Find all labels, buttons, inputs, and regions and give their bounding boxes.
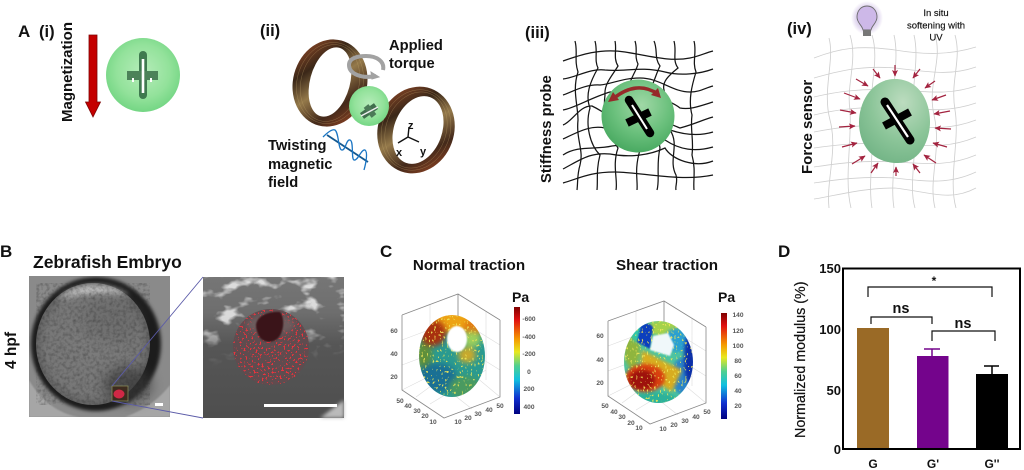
colorbar: -200 [522,351,536,358]
micrograph: whole embryo [29,276,170,417]
chart: normal traction [390,257,536,426]
icon: xyz axes: x [396,147,403,159]
colorbar: 120 [732,328,744,335]
arrows: compressive forces [839,65,951,176]
panel label B: B [0,242,12,261]
axis tick labels: 40 [404,403,412,410]
significance bracket star [868,274,992,297]
axis tick labels: 60 [390,328,398,335]
zoom connector lines [112,277,203,418]
colorbar: 140 [732,312,744,319]
colorbar: Pa [512,289,529,305]
bar G' with error bar [917,349,948,449]
significance bracket ns right [932,316,995,341]
icon: right coil [365,76,467,184]
y-axis tick labels: 0 [834,442,841,457]
label (i): (i) [39,23,55,41]
panel: B zebrafish embryo [0,242,344,418]
axis tick labels: 50 [496,403,504,410]
axis tick labels: 10 [659,426,667,433]
3D axes box [608,301,706,424]
colorbar: 200 [523,386,535,393]
icon: xyz axes: z [408,120,414,132]
label Applied torque: Applied [389,38,443,54]
arrow: bidirectional rotation [608,88,661,102]
label Twisting magnetic field: field [268,175,298,191]
axis tick labels: 60 [596,333,604,340]
panel label A: A [18,22,30,41]
bar G [857,328,889,449]
label Force sensor: Force sensor [799,80,816,174]
icon: xyz axes [396,120,427,159]
title Normal traction: Normal traction [413,257,525,274]
title Shear traction: Shear traction [616,257,718,274]
axis tick labels [596,333,711,433]
text: in situ softening: softening with [907,20,965,32]
significance bracket star: * [932,274,937,288]
panel: C traction maps [380,242,744,433]
axis tick labels [390,328,504,426]
axis tick labels: 20 [670,422,678,429]
y-axis tick labels [819,261,841,457]
title Zebrafish Embryo: Zebrafish Embryo [33,252,182,272]
axis tick labels: 20 [464,415,472,422]
3D surface [419,315,485,397]
axis tick labels: 30 [474,411,482,418]
colorbar [718,289,744,419]
colorbar: -400 [522,334,536,341]
colorbar: Pa [718,289,735,305]
colorbar: 60 [734,373,742,380]
text: in situ softening: UV [929,32,943,44]
axis tick labels: 20 [390,374,398,381]
icon: green droplet with rod [106,38,180,112]
icon: small droplet [349,86,389,126]
significance bracket ns left: ns [893,301,909,317]
axis tick labels: 10 [429,419,437,426]
panel label C: C [380,242,392,261]
colorbar: 0 [527,369,531,376]
panel: D bar chart [778,242,1020,470]
chart frame [843,268,1020,449]
axis tick labels: 30 [618,414,626,421]
significance bracket ns left [871,301,932,324]
axis tick labels: 40 [390,351,398,358]
y-axis tick labels: 150 [819,261,841,276]
axis tick labels: 10 [454,419,462,426]
text: in situ softening: In situ [923,8,949,19]
significance bracket ns right: ns [955,316,971,332]
x-axis labels [868,457,1000,470]
icon: deformed droplet [859,79,930,163]
label Twisting magnetic field: Twisting [268,138,326,154]
panel: A(iv) force sensor [787,1,976,208]
colorbar: 40 [734,388,742,395]
axis tick labels: 40 [596,357,604,364]
panel label D: D [778,242,790,261]
axis tick labels: 20 [596,380,604,387]
chart: shear traction [596,257,744,433]
y-axis tick labels: 50 [827,383,841,398]
arrow: magnetization direction [86,35,100,117]
axis tick labels: 50 [703,409,711,416]
axis tick labels: 30 [681,418,689,425]
axis tick labels: 40 [610,409,618,416]
icon: torque arrow [349,56,383,79]
3D axes box [402,294,500,418]
soft mesh [814,35,976,208]
colorbar [512,289,536,414]
axis tick labels: 50 [601,403,609,410]
panel: A(ii) twisting field [260,22,467,191]
scale bars [155,403,337,407]
axis tick labels: 50 [396,398,404,405]
label Stiffness probe: Stiffness probe [539,75,555,183]
colorbar: -600 [522,316,536,323]
icon: UV light bulb [851,1,883,36]
icon: xyz axes: y [420,146,427,158]
panel: A(iii) stiffness probe [525,24,713,190]
colorbar: 400 [523,404,535,411]
deformed mesh [563,41,713,190]
axis tick labels: 30 [413,408,421,415]
axis tick labels: 40 [692,414,700,421]
label (ii): (ii) [260,22,280,40]
colorbar: 80 [734,358,742,365]
axis tick labels: 40 [485,407,493,414]
y-axis title: Normalized modulus (%) [793,281,809,438]
panel: A(i) magnetization [39,22,180,122]
icon: twisting field wave [323,130,368,170]
colorbar: 100 [732,343,744,350]
bar G'' with error bar [976,366,1008,449]
label (iii): (iii) [525,24,550,42]
icon: droplet with rod [602,80,674,152]
zoom region marker [112,386,128,401]
label (iv): (iv) [787,20,812,38]
label 4 hpf: 4 hpf [3,331,20,369]
label Magnetization: Magnetization [59,22,76,122]
axis tick labels: 20 [421,413,429,420]
y-axis tick labels: 100 [819,322,841,337]
micrograph: zoomed embryo [203,277,344,418]
3D surface [624,321,693,403]
icon: left coil [283,31,377,135]
axis tick labels: 20 [627,420,635,427]
label Twisting magnetic field: magnetic [268,157,332,173]
axis tick labels: 10 [635,425,643,432]
colorbar: 20 [734,403,742,410]
label Applied torque: torque [389,56,435,72]
